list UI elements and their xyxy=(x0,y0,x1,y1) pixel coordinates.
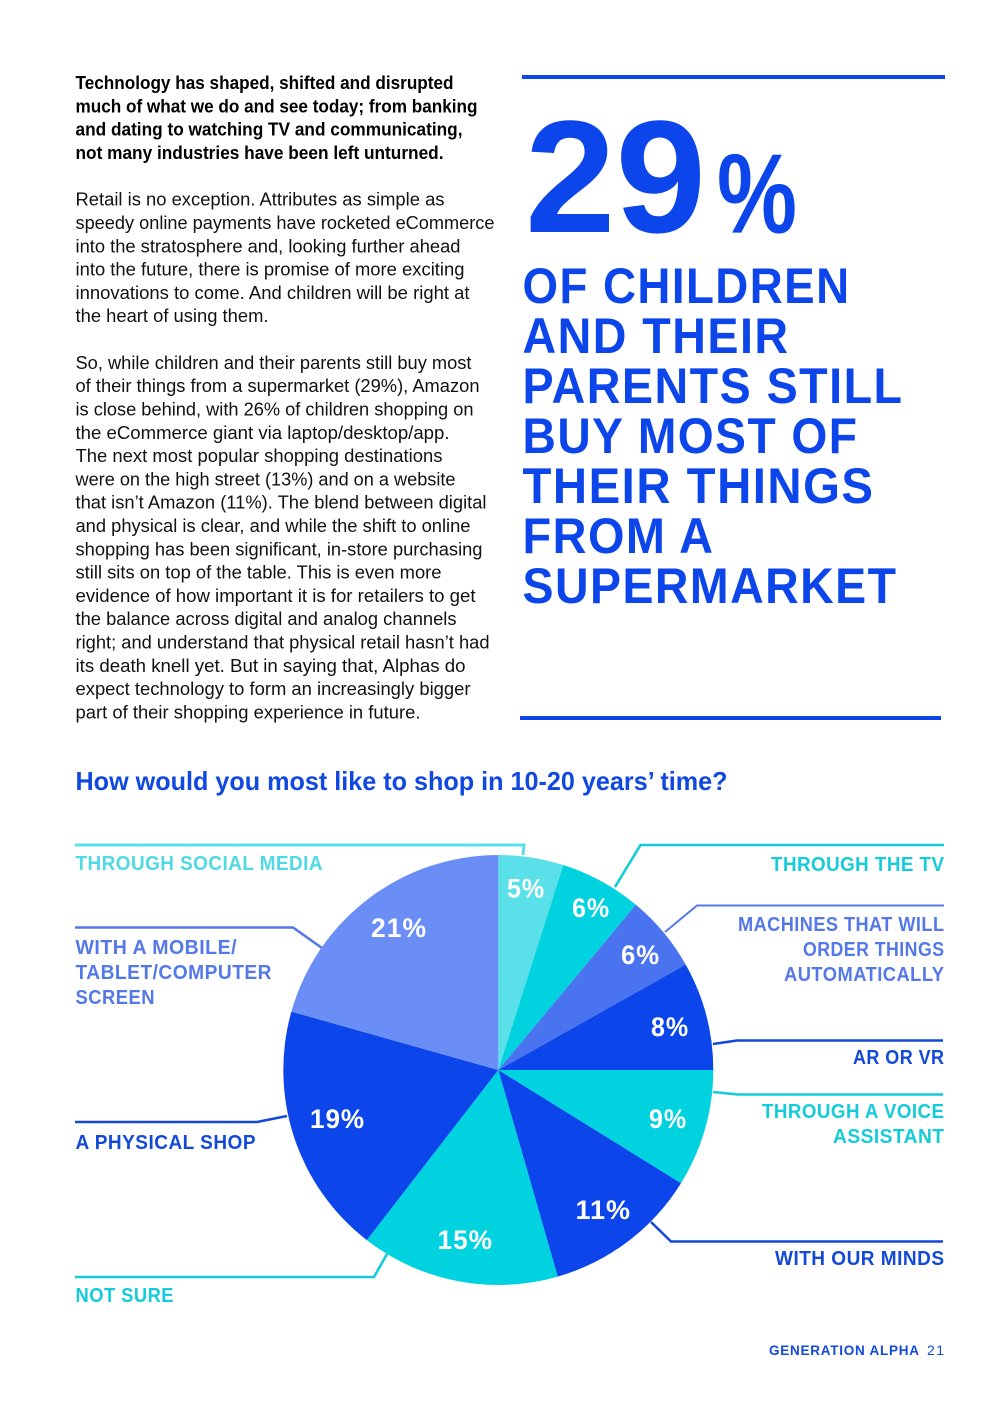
footer: publication name and page number: 21 xyxy=(927,1342,944,1358)
label: AR or VR xyxy=(713,1040,945,1069)
percent sign: % xyxy=(717,130,797,256)
slice: not sure 15% xyxy=(367,1070,558,1285)
label: with a mobile/tablet/computer screen xyxy=(75,928,322,1009)
percentage labels: 11% xyxy=(576,1195,631,1225)
label: through the TV xyxy=(615,845,945,887)
label: not sure: NOT SURE xyxy=(76,1285,174,1307)
body text: shopping destinations paragraph: is close behind, with 26% of children shopping on xyxy=(76,400,474,420)
callout headline: THEIR THINGS xyxy=(522,457,874,514)
label: through a voice assistant: ASSISTANT xyxy=(833,1126,944,1148)
label: through social media xyxy=(75,845,524,875)
slice: machines 6% xyxy=(498,905,686,1070)
intro text: bold paragraph xyxy=(76,73,478,163)
body text: shopping destinations paragraph: So, while children and their parents still buy most xyxy=(76,353,472,373)
body text: retail paragraph xyxy=(76,190,495,326)
intro text: bold paragraph: and dating to watching TV and communicating, xyxy=(76,120,462,140)
callout headline: AND THEIR xyxy=(522,307,790,364)
body text: retail paragraph: the heart of using them. xyxy=(76,306,268,326)
label: through a voice assistant xyxy=(713,1092,944,1148)
body text: shopping destinations paragraph: were on the high street (13%) and on a website xyxy=(74,469,456,489)
body text: shopping destinations paragraph: its death knell yet. But in saying that, Alphas do xyxy=(76,656,466,676)
body text: shopping destinations paragraph: The next most popular shopping destinations xyxy=(76,446,443,466)
body text: shopping destinations paragraph: right; and understand that physical retail hasn’t had xyxy=(76,632,490,652)
label: through a voice assistant: THROUGH A VOICE xyxy=(762,1101,944,1123)
label: through social media: THROUGH SOCIAL MEDIA xyxy=(76,853,323,875)
percentage labels: 19% xyxy=(310,1104,365,1134)
label: a physical shop xyxy=(75,1116,287,1154)
intro text: bold paragraph: not many industries have been left unturned. xyxy=(76,143,444,163)
label: a physical shop: A PHYSICAL SHOP xyxy=(76,1132,256,1154)
callout: 29% statistic xyxy=(520,75,945,720)
body text: shopping destinations paragraph: part of their shopping experience in future. xyxy=(76,702,420,722)
body text: retail paragraph: into the future, there is promise of more exciting xyxy=(76,260,465,280)
percentage labels: 5% xyxy=(507,874,545,904)
callout headline xyxy=(522,257,904,614)
callout headline: SUPERMARKET xyxy=(522,557,898,614)
label: not sure xyxy=(75,1254,387,1307)
pie chart xyxy=(283,855,713,1285)
slice: with our minds 11% xyxy=(498,1070,681,1277)
intro text: bold paragraph: much of what we do and see today; from banking xyxy=(76,96,478,116)
body text: shopping destinations paragraph: the balance across digital and analog channels xyxy=(76,609,456,629)
body text: retail paragraph: Retail is no exception. Attributes as simple as xyxy=(76,190,444,210)
slice: through social media 5% xyxy=(498,855,563,1070)
body text: shopping destinations paragraph: and physical is clear, and while the shift to online xyxy=(76,516,470,536)
percentage labels: 6% xyxy=(572,893,610,923)
callout headline: FROM A xyxy=(522,507,714,564)
big number 29: 29 xyxy=(525,87,706,266)
intro text: bold paragraph: Technology has shaped, shifted and disrupted xyxy=(76,73,454,93)
slice: a physical shop 19% xyxy=(283,1012,498,1240)
chart heading: How would you most like to shop in 10-20 years’ time? xyxy=(76,766,728,796)
label: AR or VR: AR OR VR xyxy=(853,1047,945,1069)
body text: shopping destinations paragraph: expect technology to form an increasingly bigger xyxy=(76,679,471,699)
label: with a mobile/tablet/computer screen: TABLET/COMPUTER xyxy=(76,962,272,984)
callout headline: PARENTS STILL xyxy=(522,357,904,414)
body text: shopping destinations paragraph: the eCommerce giant via laptop/desktop/app. xyxy=(76,423,449,443)
percentage labels: 8% xyxy=(651,1012,689,1042)
percentage labels: 21% xyxy=(371,913,427,943)
label: machines that will order things automatically: ORDER THINGS xyxy=(803,939,944,961)
slice: through the TV 6% xyxy=(498,865,636,1070)
label: with a mobile/tablet/computer screen: SCREEN xyxy=(76,987,155,1009)
label: machines that will order things automatically xyxy=(665,906,945,986)
body text: shopping destinations paragraph xyxy=(74,353,490,722)
percentage labels: 9% xyxy=(649,1104,687,1134)
slice: AR or VR 8% xyxy=(498,965,713,1070)
label: with our minds: WITH OUR MINDS xyxy=(775,1248,944,1270)
slice: mobile/tablet/computer 21% xyxy=(291,855,498,1070)
slice: voice assistant 9% xyxy=(498,1070,713,1183)
label: with our minds xyxy=(651,1222,944,1270)
label: through the TV: THROUGH THE TV xyxy=(771,854,945,876)
footer: publication name and page number: GENERATION ALPHA xyxy=(769,1343,919,1358)
label: with a mobile/tablet/computer screen: WITH A MOBILE/ xyxy=(76,937,237,959)
body text: shopping destinations paragraph: that isn’t Amazon (11%). The blend between digital xyxy=(76,493,486,513)
body text: shopping destinations paragraph: still sits on top of the table. This is even more xyxy=(76,563,442,583)
callout headline: OF CHILDREN xyxy=(522,257,850,314)
label: machines that will order things automatically: MACHINES THAT WILL xyxy=(738,914,944,936)
callout headline: BUY MOST OF xyxy=(522,407,858,464)
label: machines that will order things automatically: AUTOMATICALLY xyxy=(784,964,945,986)
body text: retail paragraph: speedy online payments have rocketed eCommerce xyxy=(76,213,495,233)
percentage labels xyxy=(310,874,689,1255)
percentage labels: 15% xyxy=(438,1225,493,1255)
body text: shopping destinations paragraph: evidence of how important it is for retailers to get xyxy=(76,586,476,606)
body text: retail paragraph: innovations to come. And children will be right at xyxy=(76,283,470,303)
percentage labels: 6% xyxy=(621,940,660,970)
body text: retail paragraph: into the stratosphere and, looking further ahead xyxy=(76,236,460,256)
body text: shopping destinations paragraph: of their things from a supermarket (29%), Amazon xyxy=(76,376,480,396)
body text: shopping destinations paragraph: shopping has been significant, in-store purchasing xyxy=(76,539,482,559)
